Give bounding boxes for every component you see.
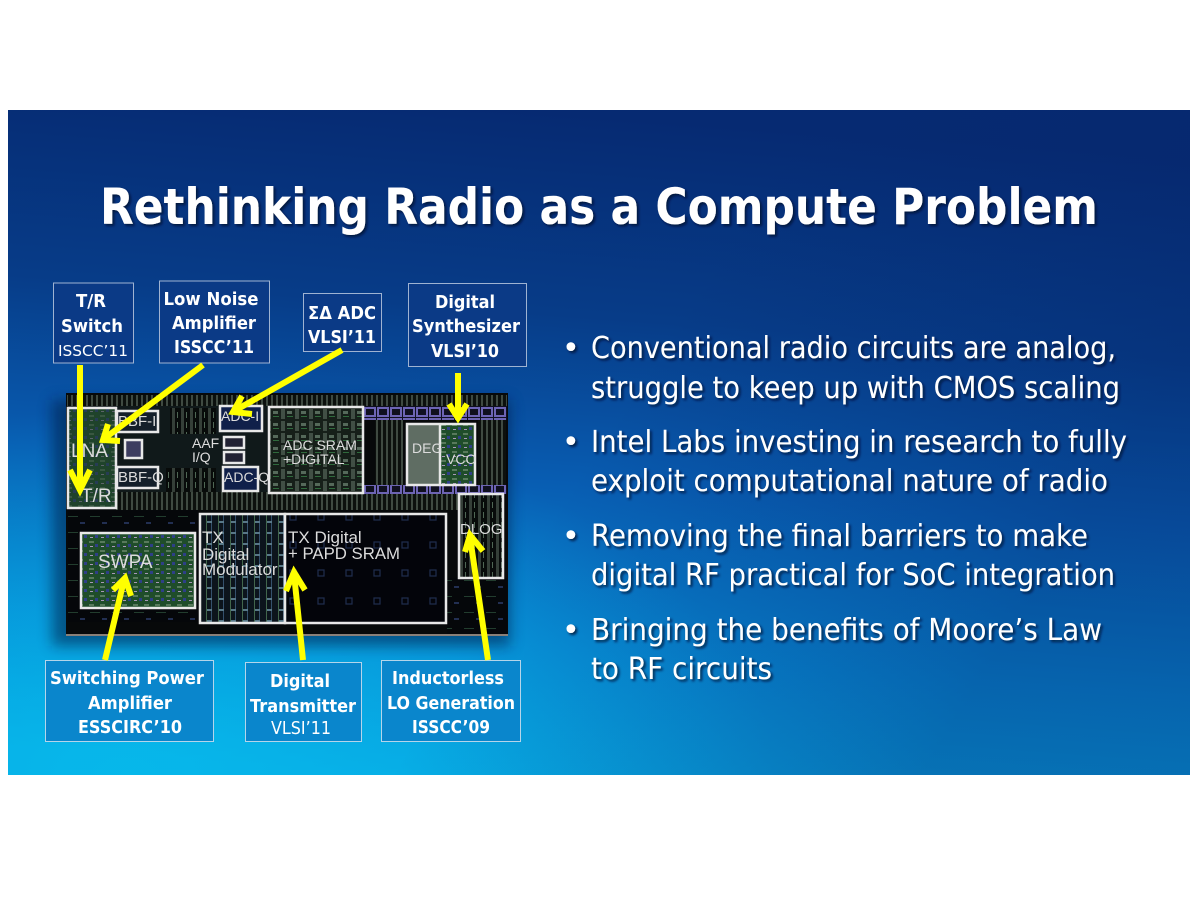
label: Digital Transmitter: VLSI’11 (271, 718, 331, 739)
bullet 3: Removing the final barriers to make (591, 519, 1088, 554)
bullet 1: • (562, 331, 580, 366)
slide background (8, 110, 1190, 775)
block: T/R and LNA region: LNA (71, 441, 108, 462)
block: TX digital and PAPD SRAM (285, 514, 446, 623)
block: TX digital and PAPD SRAM: TX Digital (288, 528, 362, 547)
block: TX digital and PAPD SRAM: + PAPD SRAM (288, 544, 400, 563)
block: DEG and VCO: DEG (412, 440, 442, 456)
block: DEG and VCO: VCO (446, 451, 476, 467)
block: ADC-I (220, 406, 262, 431)
label: Inductorless LO Generation: Inductorless (392, 668, 504, 689)
label: T/R Switch (54, 283, 134, 363)
block: T/R and LNA region: T/R (81, 486, 112, 507)
label: Low Noise Amplifier: Low Noise (164, 289, 258, 310)
label: Low Noise Amplifier: ISSCC’11 (174, 337, 254, 358)
block: DLOG (459, 494, 503, 578)
bullet 4: • (562, 613, 580, 648)
block: T/R and LNA region (68, 408, 116, 508)
arrow: sigma-delta ADC (233, 350, 342, 414)
block: TX digital modulator: Digital (202, 545, 249, 564)
block: SWPA: SWPA (98, 552, 153, 573)
block: DLOG: DLOG (460, 521, 503, 538)
block: ADC SRAM digital: ADC SRAM (283, 437, 357, 453)
bullet 4 (562, 613, 1102, 687)
label: Sigma-Delta ADC: VLSI’11 (308, 327, 376, 348)
block: ADC-Q (223, 467, 269, 491)
label: T/R Switch: Switch (61, 316, 123, 337)
label: Digital Synthesizer (408, 284, 526, 366)
bullet 2: exploit computational nature of radio (591, 464, 1108, 499)
label: Inductorless LO Generation: ISSCC’09 (412, 717, 490, 738)
block: BBF-I: BBF-I (118, 413, 156, 430)
arrow: T/R switch (70, 365, 90, 490)
label: Inductorless LO Generation: LO Generation (387, 693, 515, 714)
label: Switching Power Amplifier: ESSCIRC’10 (78, 717, 182, 738)
bullet 4: Bringing the benefits of Moore’s Law (591, 613, 1102, 648)
block: TX digital modulator: Modulator (202, 560, 278, 579)
bullet 2: • (562, 425, 580, 460)
label: Switching Power Amplifier: Switching Power (50, 668, 204, 689)
bullet list (562, 331, 1127, 687)
label: Digital Transmitter: Digital (270, 671, 330, 692)
block: TX digital modulator (200, 514, 285, 623)
block: SWPA (81, 533, 195, 608)
chip die layout (52, 393, 510, 646)
bullet 1: Conventional radio circuits are analog, (591, 331, 1116, 366)
bullet 2: Intel Labs investing in research to fully (591, 425, 1127, 460)
arrow: switching power amplifier (105, 578, 131, 660)
bullet 2 (562, 425, 1127, 499)
label: Switching Power Amplifier (46, 660, 214, 742)
bullet 3: digital RF practical for SoC integration (591, 558, 1115, 593)
bullet 3: • (562, 519, 580, 554)
bullet 1: struggle to keep up with CMOS scaling (591, 371, 1120, 406)
arrow: low noise amplifier (103, 365, 203, 441)
block: small mixer (125, 440, 142, 458)
label: Digital Synthesizer: Digital (435, 292, 495, 313)
block: DEG and VCO (407, 424, 476, 485)
label: Switching Power Amplifier: Amplifier (88, 693, 172, 714)
label: Low Noise Amplifier: Amplifier (172, 313, 256, 334)
bullet 3 (562, 519, 1115, 593)
label: Sigma-Delta ADC: ΣΔ ADC (308, 303, 376, 324)
arrow: inductorless LO generation (465, 535, 488, 660)
label: Digital Synthesizer: VLSI’10 (431, 341, 499, 362)
block: AAF I/Q: AAF (192, 435, 219, 451)
block: AAF I/Q (192, 435, 244, 465)
label: Digital Transmitter (246, 662, 362, 742)
block: AAF I/Q: I/Q (192, 449, 211, 465)
block: ADC-Q: ADC-Q (224, 469, 269, 485)
label: Digital Transmitter: Transmitter (250, 696, 356, 717)
block: ADC SRAM digital (269, 407, 363, 493)
label: T/R Switch: T/R (76, 291, 106, 312)
label: Digital Synthesizer: Synthesizer (412, 316, 520, 337)
label: T/R Switch: ISSCC’11 (58, 342, 128, 360)
arrow: digital transmitter (286, 572, 305, 660)
block: BBF-Q: BBF-Q (118, 469, 164, 486)
label: Inductorless LO Generation (382, 660, 520, 742)
bullet 4: to RF circuits (591, 652, 772, 687)
block: TX digital modulator: TX (202, 528, 224, 547)
arrow: digital synthesizer (449, 373, 467, 418)
label: Low Noise Amplifier (160, 281, 270, 363)
block: ADC-I: ADC-I (221, 408, 259, 424)
block: ADC SRAM digital: +DIGITAL (283, 451, 345, 467)
label: Sigma-Delta ADC (304, 294, 382, 352)
bullet 1 (562, 331, 1120, 406)
